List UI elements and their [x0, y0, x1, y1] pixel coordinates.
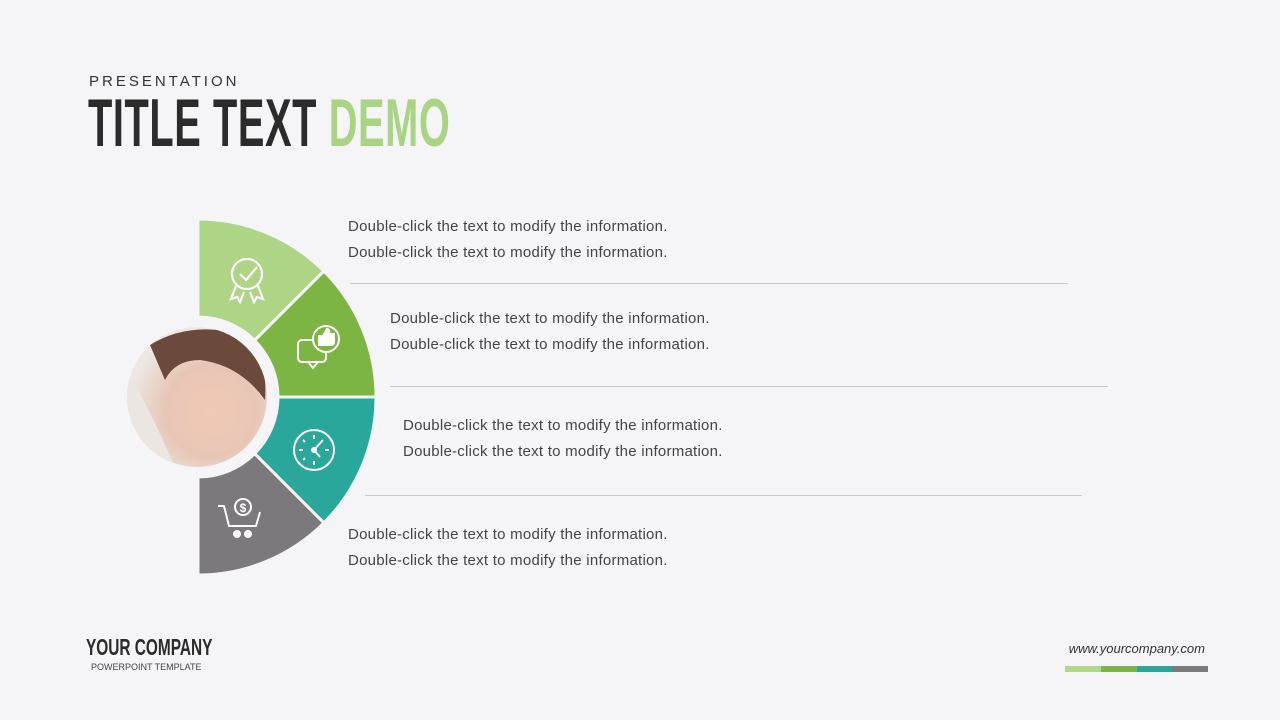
- text block 3: [403, 417, 723, 460]
- text block 4: Double-click the text to modify the information.: [348, 526, 668, 543]
- footer company: [86, 634, 212, 672]
- text block 3: Double-click the text to modify the information.: [403, 417, 723, 434]
- text block 4: [348, 526, 668, 569]
- title: TITLE TEXT DEMO: [88, 85, 450, 161]
- footer company: YOUR COMPANY: [86, 634, 212, 660]
- footer color bars: [1065, 666, 1208, 672]
- text block 2: Double-click the text to modify the information.: [390, 310, 710, 327]
- text block 3: Double-click the text to modify the information.: [403, 443, 723, 460]
- icon: clock: [294, 430, 334, 470]
- segment 4: [198, 454, 324, 575]
- text block 2: Double-click the text to modify the information.: [390, 336, 710, 353]
- icon: thumbs up chat: [298, 326, 339, 368]
- text block 4: Double-click the text to modify the information.: [348, 552, 668, 569]
- text block 1: [348, 218, 668, 261]
- segment 1: [198, 219, 324, 340]
- text block 1: Double-click the text to modify the information.: [348, 244, 668, 261]
- text block 2: [390, 310, 710, 353]
- text block 1: Double-click the text to modify the information.: [348, 218, 668, 235]
- diagram: semicircle wheel: [127, 220, 374, 574]
- segment 2: [255, 271, 376, 397]
- icon: award check: [231, 259, 263, 302]
- footer website: www.yourcompany.com: [1069, 641, 1205, 656]
- icon: cart dollar: $: [240, 501, 247, 515]
- subtitle: PRESENTATION: [89, 73, 239, 90]
- footer company: POWERPOINT TEMPLATE: [91, 662, 202, 672]
- segment 3: [255, 397, 376, 523]
- photo circle: [127, 327, 267, 467]
